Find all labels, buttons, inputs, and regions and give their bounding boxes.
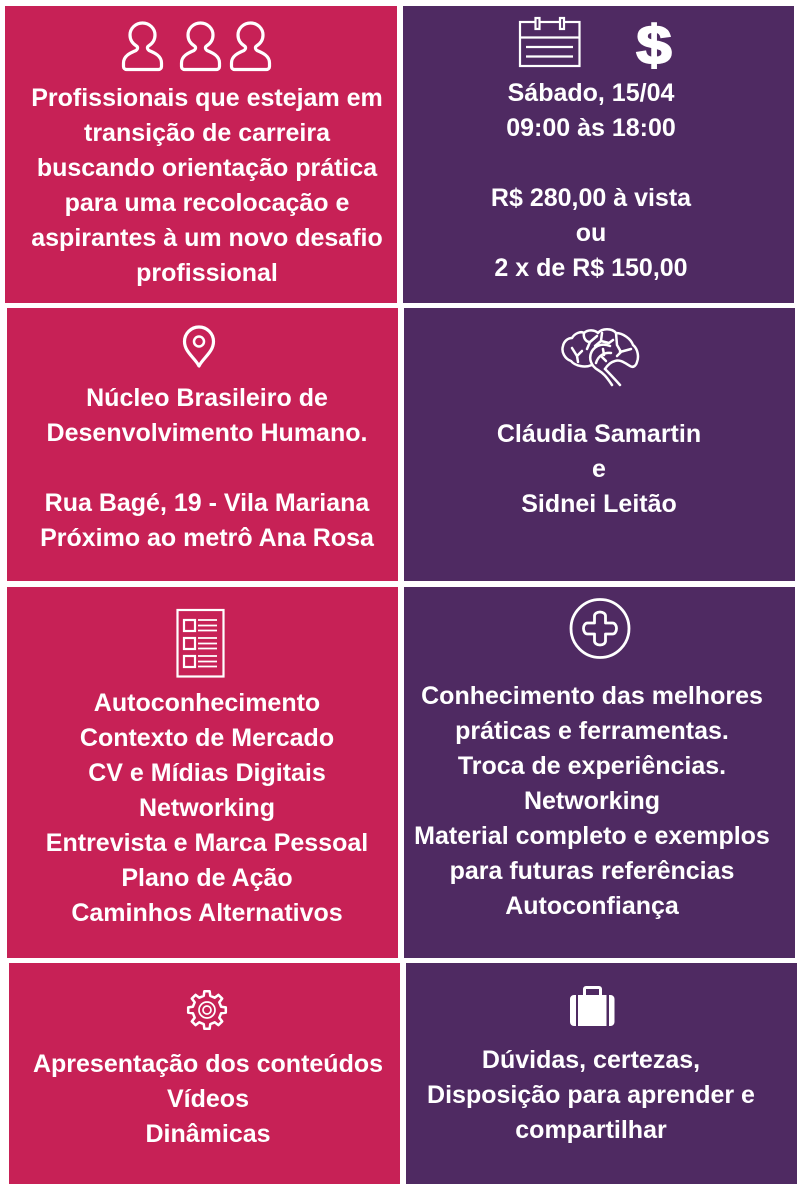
panel: location: [7, 308, 398, 581]
text: location: Núcleo Brasileiro de: [86, 384, 328, 412]
text: benefits: Material completo e exemplos: [414, 822, 770, 850]
icon: dollar sign: $: [636, 14, 672, 76]
text: audience: aspirantes à um novo desafio: [31, 224, 383, 252]
icon: three people: [122, 21, 272, 72]
text: topics: [46, 689, 368, 927]
text: date and price: R$ 280,00 à vista: [491, 184, 691, 212]
text: benefits: para futuras referências: [450, 857, 734, 885]
text: location: Rua Bagé, 19 - Vila Mariana: [45, 489, 369, 517]
text: location: Desenvolvimento Humano.: [47, 419, 367, 447]
text: what to bring: [427, 1046, 755, 1144]
panel: audience: [5, 6, 397, 303]
text: methods: Apresentação dos conteúdos: [33, 1050, 383, 1078]
text: what to bring: Disposição para aprender e: [427, 1081, 755, 1109]
panel: benefits: [404, 587, 795, 958]
panel: topics: [7, 587, 398, 958]
text: methods: [33, 1050, 383, 1148]
text: instructors: [497, 420, 701, 518]
icon: calendar: [518, 16, 581, 68]
icon: plus in circle: [570, 598, 630, 659]
text: benefits: práticas e ferramentas.: [455, 717, 729, 745]
icon: brain: [561, 328, 640, 386]
text: date and price: 09:00 às 18:00: [506, 114, 676, 142]
text: audience: buscando orientação prática: [37, 154, 377, 182]
text: location: Próximo ao metrô Ana Rosa: [40, 524, 374, 552]
text: instructors: e: [592, 455, 606, 483]
text: what to bring: Dúvidas, certezas,: [482, 1046, 700, 1074]
text: topics: Networking: [139, 794, 275, 822]
text: benefits: Networking: [524, 787, 660, 815]
text: topics: Caminhos Alternativos: [71, 899, 343, 927]
text: what to bring: compartilhar: [515, 1116, 667, 1144]
text: date and price: 2 x de R$ 150,00: [494, 254, 688, 282]
panel: date and price: [403, 6, 794, 303]
text: audience: [31, 84, 383, 287]
text: methods: Vídeos: [167, 1085, 249, 1113]
text: methods: Dinâmicas: [145, 1120, 271, 1148]
text: audience: profissional: [136, 259, 278, 287]
text: date and price: ou: [576, 219, 606, 247]
text: topics: Contexto de Mercado: [80, 724, 334, 752]
text: topics: Autoconhecimento: [94, 689, 320, 717]
text: audience: transição de carreira: [84, 119, 330, 147]
icon: map pin: [182, 325, 216, 368]
text: instructors: Cláudia Samartin: [497, 420, 701, 448]
text: topics: CV e Mídias Digitais: [88, 759, 326, 787]
text: benefits: Autoconfiança: [505, 892, 679, 920]
text: audience: Profissionais que estejam em: [31, 84, 383, 112]
text: instructors: Sidnei Leitão: [521, 490, 677, 518]
text: benefits: Conhecimento das melhores: [421, 682, 763, 710]
text: location: [40, 384, 374, 552]
panel: methods: [9, 963, 400, 1184]
text: topics: Plano de Ação: [121, 864, 293, 892]
text: topics: Entrevista e Marca Pessoal: [46, 829, 368, 857]
panel: instructors: [404, 308, 795, 581]
text: audience: para uma recolocação e: [65, 189, 349, 217]
text: date and price: [491, 79, 692, 282]
text: benefits: [414, 682, 770, 920]
text: benefits: Troca de experiências.: [458, 752, 726, 780]
panel: what to bring: [406, 963, 797, 1184]
icon: checklist document: [176, 608, 225, 678]
text: date and price: Sábado, 15/04: [508, 79, 674, 107]
